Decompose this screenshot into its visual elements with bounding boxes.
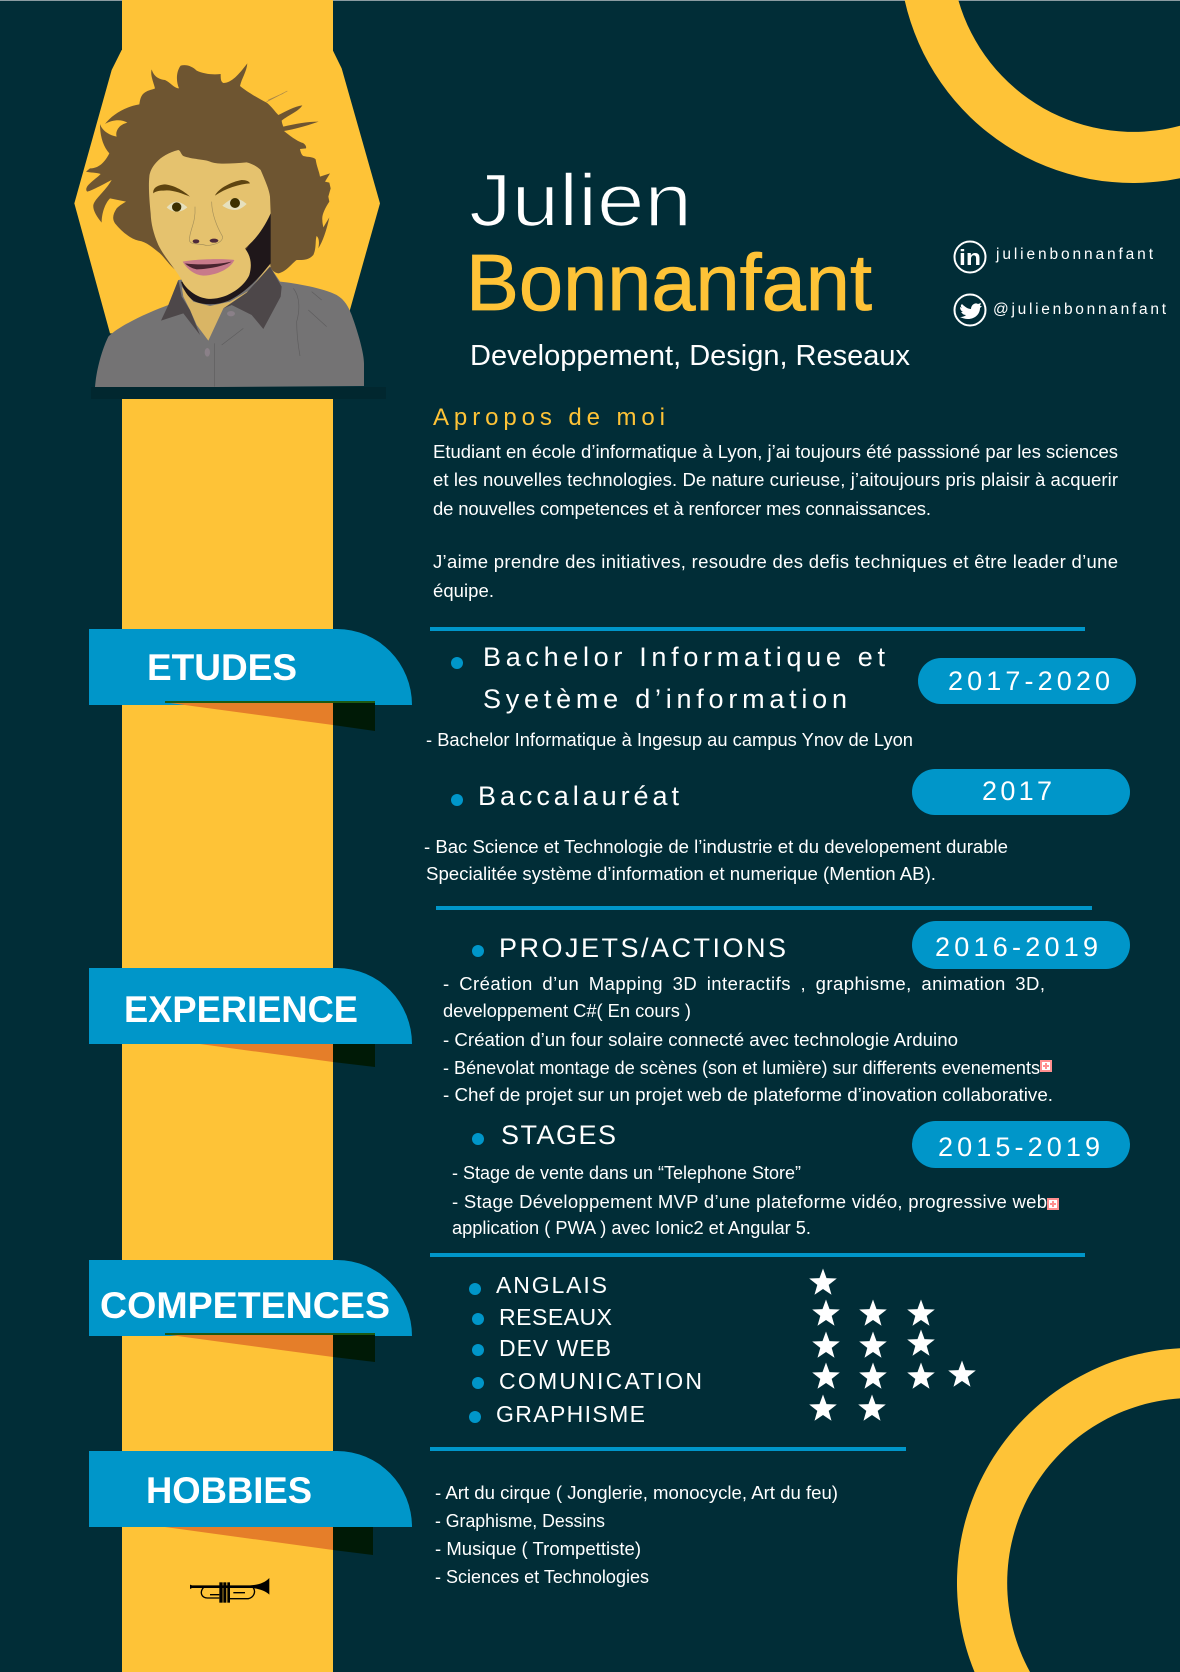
hair	[86, 63, 331, 283]
section: hobbies list: - Musique ( Trompettiste)	[435, 1538, 641, 1559]
neck shadow	[181, 213, 271, 304]
banner: competences: COMPETENCES	[100, 1285, 390, 1326]
date pill	[918, 658, 1136, 704]
section: hobbies list: - Graphisme, Dessins	[435, 1510, 605, 1531]
section: studies	[424, 642, 1136, 884]
skill labels: ANGLAIS	[496, 1272, 607, 1298]
baccalaureat description: - Bac Science et Technologie de l’industrie et du developement durable	[424, 836, 1008, 857]
skill labels: COMUNICATION	[499, 1368, 702, 1394]
banner: hobbies	[89, 1451, 412, 1555]
portrait illustration	[74, 50, 380, 387]
icon: linkedin	[954, 242, 986, 272]
projects list: developpement C#( En cours )	[443, 1000, 691, 1021]
date pill	[912, 1121, 1130, 1168]
bullet	[472, 945, 484, 957]
social: twitter	[954, 294, 1167, 326]
icon: linkedin: in	[959, 245, 981, 270]
bullet	[451, 657, 463, 669]
shirt details	[205, 288, 327, 387]
section: hobbies list: - Sciences et Technologies	[435, 1566, 649, 1587]
about text: et les nouvelles technologies. De nature curieuse, j’aitoujours pris plaisir à acquerir	[433, 469, 1118, 490]
about heading: Apropos de moi	[433, 404, 665, 431]
icon: overflow marker	[1048, 1199, 1058, 1209]
projects heading: PROJETS/ACTIONS	[499, 933, 786, 963]
internships list	[452, 1162, 1047, 1238]
eyebrows	[153, 180, 250, 197]
date pill: 2015-2019	[938, 1132, 1100, 1162]
projects list	[443, 973, 1053, 1105]
date pill	[912, 769, 1130, 815]
decorative ring: top right	[905, 0, 1180, 183]
social: linkedin	[954, 242, 1154, 272]
about text	[433, 441, 1118, 601]
social: linkedin: julienbonnanfant	[995, 246, 1154, 263]
skill labels: GRAPHISME	[496, 1401, 645, 1427]
projects list: - Création d’un Mapping 3D interactifs , graphisme, animation 3D,	[443, 973, 1045, 994]
date pill: 2016-2019	[935, 932, 1098, 962]
banner: experience: EXPERIENCE	[124, 989, 358, 1030]
icon: twitter	[954, 294, 986, 326]
hexagon backdrop	[74, 50, 380, 333]
collar	[161, 267, 282, 335]
neck	[182, 263, 271, 341]
projects list: - Bénevolat montage de scènes (son et lumière) sur differents evenements	[443, 1057, 1040, 1078]
degree heading line 2: Syetème d’information	[483, 684, 847, 714]
bullet	[451, 794, 463, 806]
degree heading: Bachelor Informatique et	[483, 642, 885, 672]
projects list: - Chef de projet sur un projet web de plateforme d’inovation collaborative.	[443, 1084, 1053, 1105]
icon: trumpet	[190, 1578, 269, 1603]
section: hobbies list: - Art du cirque ( Jonglerie, monocycle, Art du feu)	[435, 1482, 838, 1503]
skill labels: DEV WEB	[499, 1335, 611, 1361]
face	[149, 150, 271, 299]
about text: de nouvelles competences et à renforcer mes connaissances.	[433, 498, 931, 519]
section: experience	[443, 921, 1130, 1238]
bullet	[472, 1133, 484, 1145]
baccalaureat heading: Baccalauréat	[478, 781, 679, 811]
skill labels	[496, 1272, 702, 1427]
skill labels: RESEAUX	[499, 1304, 612, 1330]
shirt	[95, 267, 364, 387]
banner: competences	[89, 1260, 412, 1362]
degree description: - Bachelor Informatique à Ingesup au campus Ynov de Lyon	[426, 729, 913, 750]
icon: overflow marker	[1041, 1061, 1051, 1071]
eyes	[167, 198, 247, 212]
banner: experience	[89, 968, 412, 1067]
mouth	[183, 259, 234, 276]
projects list: - Création d’un four solaire connecté avec technologie Arduino	[443, 1029, 958, 1050]
stray hair strands	[267, 91, 287, 102]
yellow vertical strip	[122, 0, 333, 1672]
banner: etudes: ETUDES	[147, 647, 297, 688]
baccalaureat description: Specialitée système d’information et numerique (Mention AB).	[426, 863, 936, 884]
date pill	[912, 921, 1130, 969]
divider rules	[430, 627, 1092, 1451]
internships list: - Stage de vente dans un “Telephone Store”	[452, 1162, 801, 1183]
about text: J’aime prendre des initiatives, resoudre des defis techniques et être leader d’une	[433, 551, 1118, 572]
about text: Etudiant en école d’informatique à Lyon, j’ai toujours été passsioné par les sciences	[433, 441, 1118, 462]
about text: équipe.	[433, 580, 494, 601]
internships heading: STAGES	[501, 1120, 616, 1150]
section: hobbies list	[435, 1482, 838, 1587]
banner: etudes	[89, 629, 412, 731]
section: skills list	[469, 1268, 976, 1427]
date pill: 2017	[982, 776, 1052, 806]
name: Bonnanfant: Bonnanfant	[466, 238, 872, 327]
decorative ring: bottom right	[957, 1348, 1180, 1672]
internships list: application ( PWA ) avec Ionic2 et Angular 5.	[452, 1217, 811, 1238]
star ratings	[809, 1268, 976, 1421]
date pill: 2017-2020	[948, 666, 1110, 696]
name: Julien: Julien	[469, 159, 692, 242]
banner: hobbies: HOBBIES	[146, 1470, 312, 1511]
social: twitter: @julienbonnanfant	[993, 301, 1167, 318]
internships list: - Stage Développement MVP d’une plateforme vidéo, progressive web	[452, 1191, 1047, 1212]
baccalaureat description	[424, 836, 1008, 884]
bullets	[469, 1283, 484, 1423]
nose	[189, 202, 223, 246]
job title: Developpement, Design, Reseaux	[470, 340, 910, 372]
